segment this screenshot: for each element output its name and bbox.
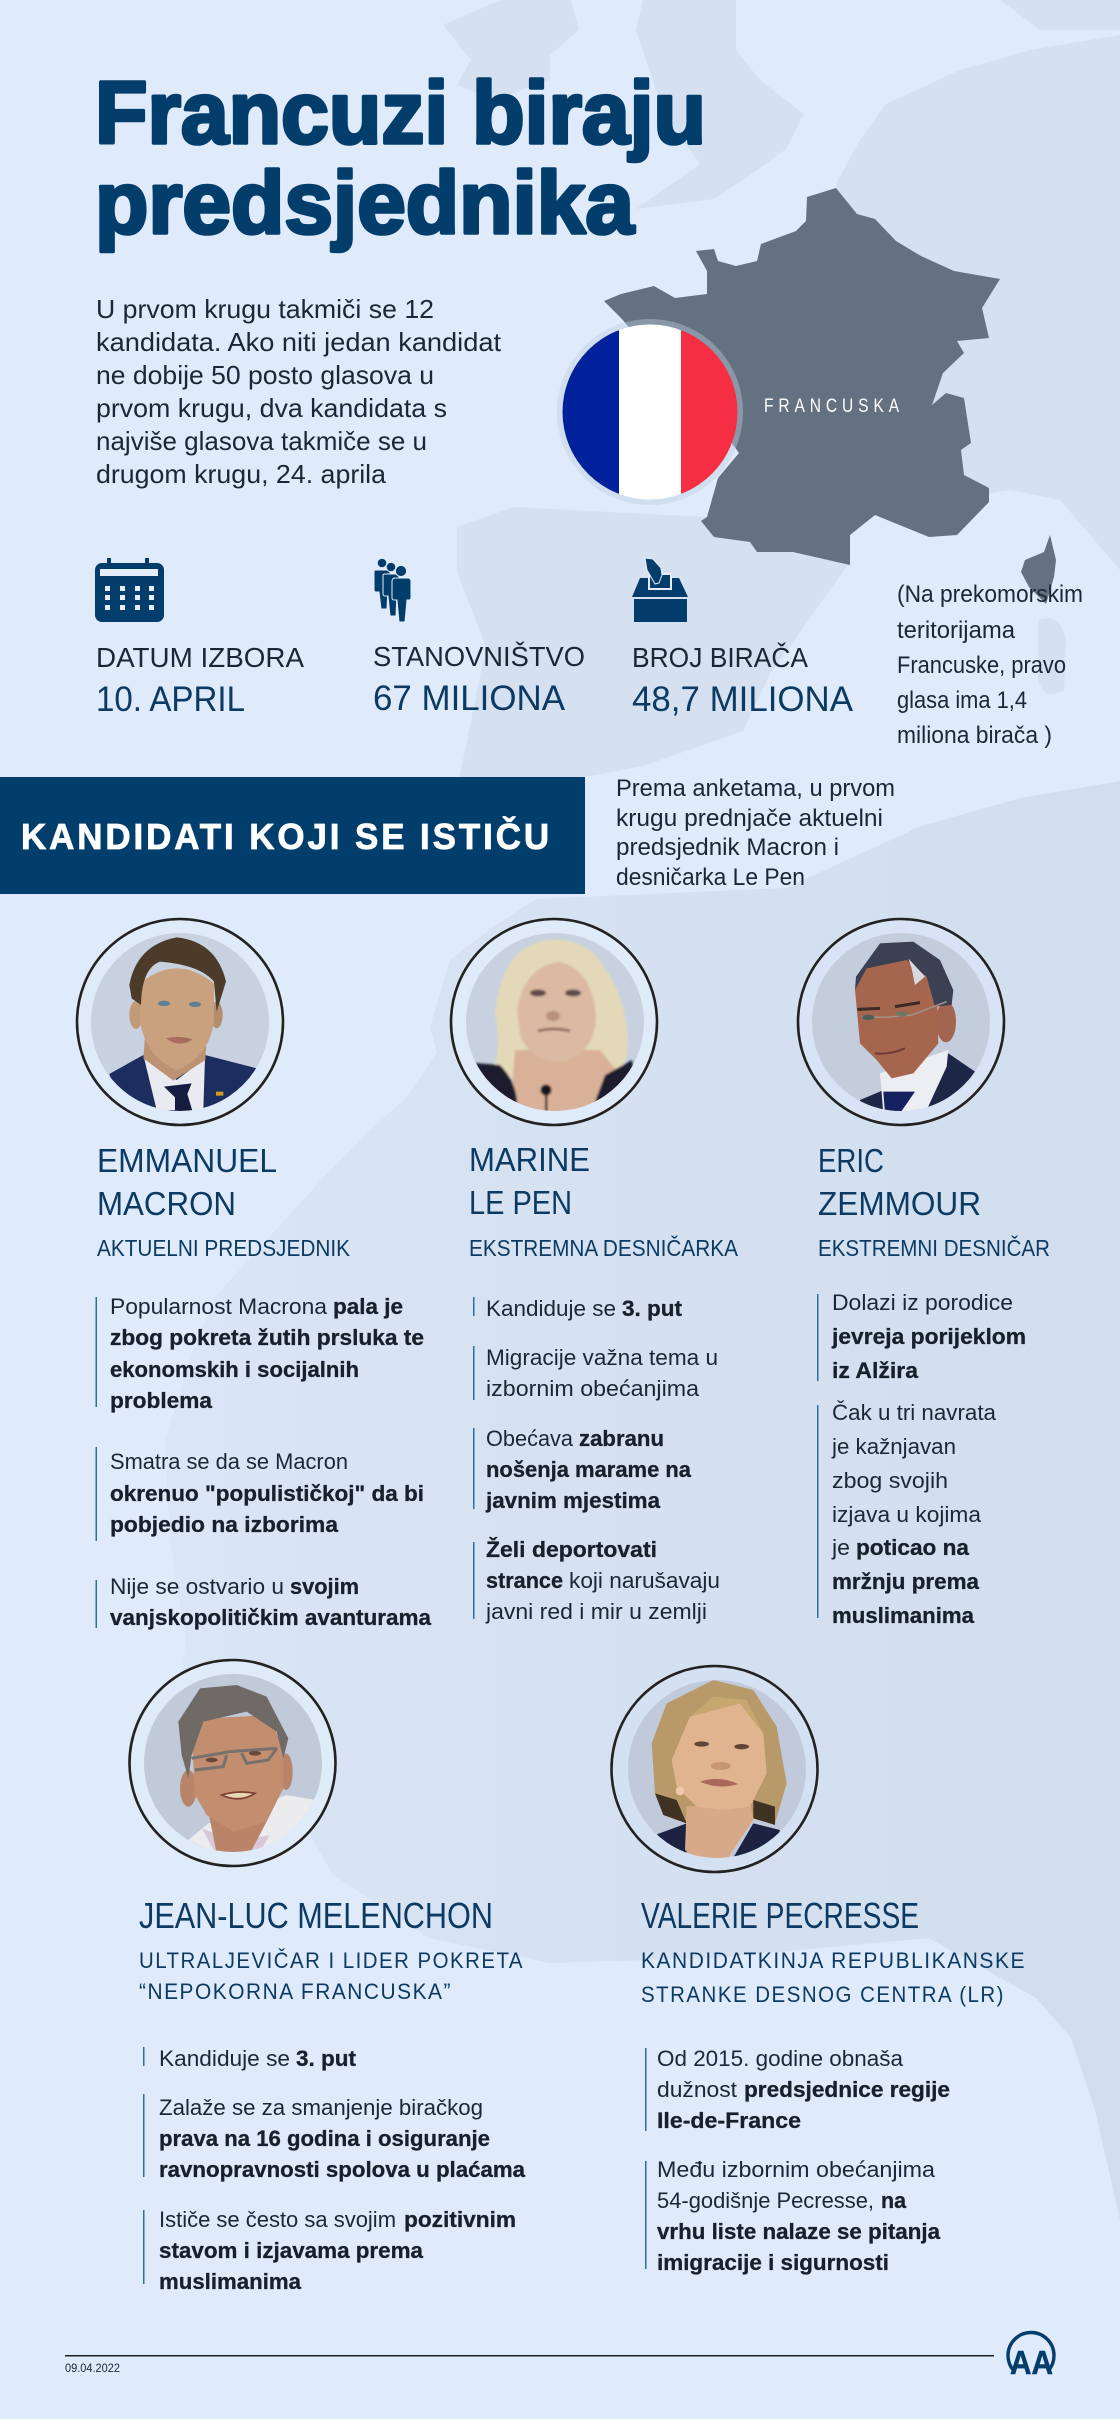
polls note: Prema anketama, u prvom — [616, 775, 895, 802]
bullets: Pecresse: Među izbornim obećanjima — [657, 2157, 935, 2182]
bullets: Pecresse: predsjednice regije — [744, 2077, 950, 2102]
bullets: Macron: zbog pokreta žutih prsluka te — [110, 1325, 424, 1350]
bullets: Pecresse: 54-godišnje Pecresse, — [657, 2188, 874, 2213]
candidate: Le Pen name: MARINE — [469, 1141, 590, 1178]
portrait: Le Pen — [451, 919, 657, 1125]
candidate: Zemmour name: ERIC — [818, 1142, 884, 1179]
candidate: Macron name: AKTUELNI PREDSJEDNIK — [97, 1235, 351, 1261]
stat: voters: 48,7 MILIONA — [632, 680, 854, 719]
stat: election date: 10. APRIL — [96, 680, 245, 719]
overseas voters note: teritorijama — [897, 617, 1016, 644]
portrait: Macron — [77, 919, 283, 1125]
map of France with flag: FRANCUSKA — [764, 396, 904, 417]
bullets: Pecresse: na — [881, 2188, 906, 2213]
map of France with flag — [557, 188, 1056, 604]
candidate: Macron name: MACRON — [97, 1185, 236, 1222]
bullets: Le Pen: javnim mjestima — [485, 1488, 660, 1513]
candidate: Macron name: EMMANUEL — [97, 1142, 277, 1179]
stat: population: STANOVNIŠTVO — [373, 641, 585, 672]
overseas voters note: glasa ima 1,4 — [897, 687, 1027, 714]
bullets: Le Pen: nošenja marame na — [486, 1457, 691, 1482]
bullets: Zemmour: je kažnjavan — [831, 1434, 956, 1459]
intro paragraph — [96, 294, 502, 489]
stat: election date — [95, 558, 304, 719]
bullets: Macron — [96, 1294, 431, 1630]
candidate: Le Pen name: LE PEN — [469, 1184, 572, 1221]
bullets: Melenchon: pozitivnim — [404, 2207, 516, 2232]
intro paragraph: kandidata. Ako niti jedan kandidat — [96, 327, 502, 357]
bullets: Le Pen: zabranu — [579, 1426, 664, 1451]
candidate: Melenchon name: JEAN-LUC MELENCHON — [139, 1895, 493, 1936]
stat: voters — [632, 558, 854, 719]
bullets: Macron: pala je — [333, 1294, 403, 1319]
bullets: Macron: pobjedio na izborima — [110, 1512, 338, 1537]
intro paragraph: najviše glasova takmiče se u — [96, 426, 427, 456]
candidate: Zemmour name: ZEMMOUR — [818, 1185, 981, 1222]
polls note: predsjednik Macron i — [616, 834, 839, 861]
bullets: Zemmour: poticao na — [856, 1535, 969, 1560]
bullets: Zemmour: Dolazi iz porodice — [832, 1290, 1013, 1315]
candidate: Le Pen name: EKSTREMNA DESNIČARKA — [469, 1234, 739, 1261]
bullets: Melenchon: Ističe se često sa svojim — [159, 2207, 396, 2232]
candidate: Pecresse name — [641, 1895, 1026, 2007]
intro paragraph: ne dobije 50 posto glasova u — [96, 360, 434, 390]
candidate: Pecresse name: KANDIDATKINJA REPUBLIKANSKE — [641, 1948, 1026, 1973]
title: Francuzi biraju — [95, 63, 706, 162]
banner heading — [0, 777, 585, 894]
portrait: Zemmour — [798, 919, 1004, 1125]
overseas voters note: (Na prekomorskim — [897, 581, 1083, 608]
bullets: Zemmour: izjava u kojima — [832, 1502, 981, 1527]
bullets: Pecresse: Od 2015. godine obnaša — [657, 2046, 903, 2071]
stat: voters: BROJ BIRAČA — [632, 642, 808, 673]
bullets: Zemmour: zbog svojih — [832, 1468, 948, 1493]
bullets: Melenchon: prava na 16 godina i osiguranje — [159, 2126, 490, 2151]
bullets: Le Pen — [473, 1296, 720, 1624]
bullets: Melenchon: ravnopravnosti spolova u plaćama — [159, 2157, 525, 2182]
bullets: Melenchon: muslimanima — [159, 2269, 301, 2294]
bullets: Macron: Smatra se da se Macron — [110, 1449, 348, 1474]
portrait: Melenchon — [130, 1660, 336, 1866]
portrait: Pecresse — [612, 1666, 818, 1873]
bullets: Zemmour: muslimanima — [832, 1603, 974, 1628]
bullets: Zemmour: Čak u tri navrata — [832, 1400, 996, 1425]
bullets: Le Pen: javni red i mir u zemlji — [485, 1599, 707, 1624]
bullets: Le Pen: Obećava — [486, 1426, 573, 1451]
candidate: Pecresse name: STRANKE DESNOG CENTRA (LR) — [641, 1982, 1005, 2007]
overseas voters note: Francuske, pravo — [897, 652, 1066, 679]
bullets: Macron: Popularnost Macrona — [110, 1294, 327, 1319]
bullets: Macron: ekonomskih i socijalnih — [110, 1357, 359, 1382]
candidate: Pecresse name: VALERIE PECRESSE — [641, 1895, 919, 1936]
overseas voters note — [897, 581, 1083, 749]
bullets: Macron: vanjskopolitičkim avanturama — [110, 1605, 431, 1630]
banner heading: KANDIDATI KOJI SE ISTIČU — [21, 815, 552, 857]
bullets: Le Pen: Migracije važna tema u — [486, 1345, 718, 1370]
footer date and rule: 09.04.2022 — [65, 2361, 120, 2375]
stat: election date: DATUM IZBORA — [96, 642, 304, 673]
icon: AA logo: AA — [1010, 2344, 1053, 2381]
intro paragraph: drugom krugu, 24. aprila — [96, 459, 387, 489]
bullets: Le Pen: Želi deportovati — [486, 1537, 657, 1562]
candidate: Le Pen name — [469, 1141, 739, 1261]
bullets: Melenchon: stavom i izjavama prema — [159, 2238, 423, 2263]
bullets: Le Pen: strance — [486, 1568, 563, 1593]
candidate: Melenchon name: “NEPOKORNA FRANCUSKA” — [139, 1979, 452, 2004]
candidate: Melenchon name: ULTRALJEVIČAR I LIDER POKRETA — [139, 1948, 524, 1973]
bullets: Zemmour: mržnju prema — [832, 1569, 979, 1594]
bullets: Le Pen: koji narušavaju — [569, 1568, 720, 1593]
intro paragraph: U prvom krugu takmiči se 12 — [96, 294, 434, 324]
bullets: Zemmour — [817, 1290, 1026, 1628]
overseas voters note: miliona birača ) — [897, 722, 1052, 749]
bullets: Le Pen: 3. put — [622, 1296, 683, 1321]
bullets: Le Pen: izbornim obećanjima — [486, 1376, 699, 1401]
bullets: Macron: okrenuo "populističkoj" da bi — [110, 1481, 424, 1506]
bullets: Pecresse: imigracije i sigurnosti — [657, 2250, 889, 2275]
bullets: Pecresse: Ile-de-France — [657, 2108, 801, 2133]
bullets: Melenchon: Zalaže se za smanjenje biračkog — [159, 2095, 483, 2120]
bullets: Macron: problema — [110, 1388, 212, 1413]
bullets: Pecresse: dužnost — [657, 2077, 738, 2102]
bullets: Zemmour: iz Alžira — [832, 1358, 918, 1383]
candidate: Macron name — [97, 1142, 351, 1261]
icon: AA logo — [1008, 2333, 1054, 2381]
bullets: Macron: Nije se ostvario u — [110, 1574, 284, 1599]
polls note: krugu prednjače aktuelni — [616, 805, 883, 832]
candidate: Zemmour name: EKSTREMNI DESNIČAR — [818, 1234, 1050, 1261]
stat: population: 67 MILIONA — [373, 679, 566, 718]
bullets: Zemmour: je — [831, 1535, 850, 1560]
bullets: Pecresse — [645, 2046, 950, 2275]
intro paragraph: prvom krugu, dva kandidata s — [96, 393, 447, 423]
stat: population — [373, 558, 585, 718]
bullets: Macron: svojim — [290, 1574, 359, 1599]
candidate: Zemmour name — [818, 1142, 1050, 1261]
bullets: Melenchon: Kandiduje se — [159, 2046, 290, 2071]
bullets: Pecresse: vrhu liste nalaze se pitanja — [657, 2219, 940, 2244]
bullets: Melenchon — [143, 2046, 525, 2294]
bullets: Le Pen: Kandiduje se — [486, 1296, 616, 1321]
bullets: Melenchon: 3. put — [296, 2046, 357, 2071]
bullets: Zemmour: jevreja porijeklom — [831, 1324, 1026, 1349]
title: predsjednika — [95, 153, 635, 252]
polls note: desničarka Le Pen — [616, 864, 805, 891]
title — [95, 63, 706, 252]
polls note — [616, 775, 895, 891]
candidate: Melenchon name — [139, 1895, 524, 2004]
